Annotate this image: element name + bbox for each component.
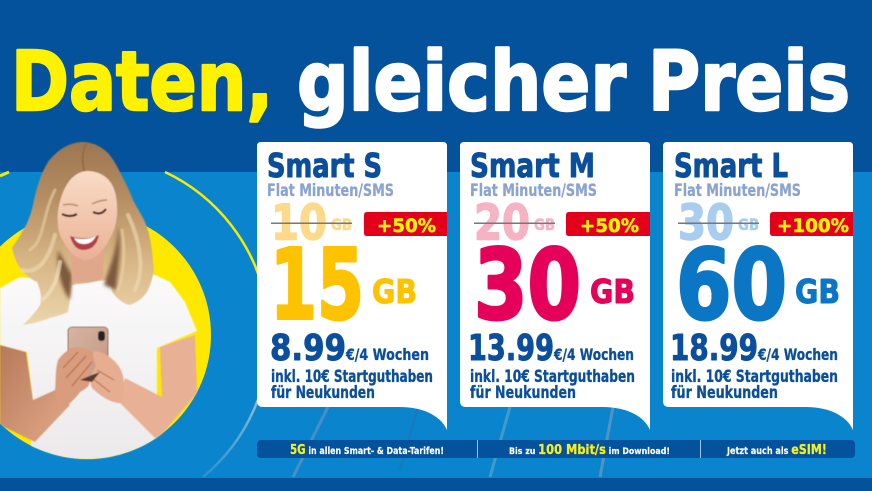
eyes and brows <box>62 209 106 216</box>
mouth <box>70 235 99 250</box>
neck <box>70 240 105 283</box>
bottom band: dark blue <box>0 478 872 491</box>
card: Smart L <box>663 142 853 430</box>
background: light blue panel <box>0 172 872 478</box>
new volume: GB <box>372 272 417 311</box>
plan name: Smart M <box>470 146 595 185</box>
new volume: GB <box>590 272 635 311</box>
plan subtitle: Flat Minuten/SMS <box>674 181 801 200</box>
hand: left <box>55 347 94 408</box>
title: gleicher <box>297 35 626 130</box>
old volume: GB <box>331 215 352 234</box>
new volume: 60 <box>676 228 787 342</box>
old volume: 20 <box>474 194 530 252</box>
old volume: 10 <box>271 194 327 252</box>
phone camera <box>98 331 105 341</box>
starter credit: inkl. 10€ Startguthaben <box>470 367 635 386</box>
hair <box>12 142 154 325</box>
bonus badge: +50% <box>377 215 436 237</box>
card shape <box>460 142 650 430</box>
bonus badge <box>566 212 650 237</box>
card shape <box>257 142 447 430</box>
price: €/4 Wochen <box>345 345 429 364</box>
right arm <box>120 335 197 440</box>
card: Smart S <box>257 142 447 430</box>
bonus badge: +50% <box>580 215 639 237</box>
plan name: Smart S <box>267 146 382 185</box>
price <box>670 328 838 369</box>
price <box>468 328 634 369</box>
bonus badge <box>364 212 447 237</box>
plan subtitle: Flat Minuten/SMS <box>470 181 597 200</box>
decorative thin circle arc <box>0 172 613 477</box>
feature: 5G: 5G in allen Smart- & Data-Tarifen! <box>290 443 444 458</box>
feature: 100 Mbit/s: Bis zu 100 Mbit/s im Download! <box>509 443 670 458</box>
old volume: 30 <box>678 194 734 252</box>
price <box>270 328 429 369</box>
face <box>58 171 117 260</box>
hair strands <box>22 144 140 300</box>
plan subtitle: Flat Minuten/SMS <box>267 181 394 200</box>
phone <box>68 327 108 377</box>
title: Daten, <box>11 35 273 130</box>
starter credit <box>470 367 635 402</box>
feature bar <box>257 440 855 458</box>
starter credit: für Neukunden <box>470 383 576 402</box>
old volume: GB <box>738 215 759 234</box>
left arm <box>0 345 70 442</box>
bonus badge: +100% <box>777 215 849 237</box>
card: Smart M <box>460 142 650 430</box>
starter credit: für Neukunden <box>271 383 375 402</box>
starter credit: inkl. 10€ Startguthaben <box>271 367 433 386</box>
new volume: 30 <box>474 228 581 342</box>
price: 8.99 <box>270 328 346 369</box>
hand: right <box>90 351 124 403</box>
hair shadow near neck <box>58 225 120 300</box>
feature: eSIM: Jetzt auch als eSIM! <box>726 443 827 458</box>
shirt <box>0 275 197 470</box>
finger lines <box>63 352 114 392</box>
price: €/4 Wochen <box>757 345 838 364</box>
starter credit <box>271 367 433 402</box>
new volume: 15 <box>270 228 364 342</box>
top band: dark blue <box>0 0 872 172</box>
title <box>11 35 850 130</box>
yellow circle behind the woman <box>0 211 211 459</box>
plan name: Smart L <box>674 146 788 185</box>
photo: woman looking at smartphone <box>0 142 197 470</box>
price: €/4 Wochen <box>553 345 634 364</box>
card shape <box>663 142 853 430</box>
old volume: GB <box>534 215 555 234</box>
price: 13.99 <box>468 328 554 369</box>
price: 18.99 <box>670 328 758 369</box>
starter credit <box>671 367 838 402</box>
starter credit: für Neukunden <box>671 383 778 402</box>
new volume: GB <box>795 272 840 311</box>
